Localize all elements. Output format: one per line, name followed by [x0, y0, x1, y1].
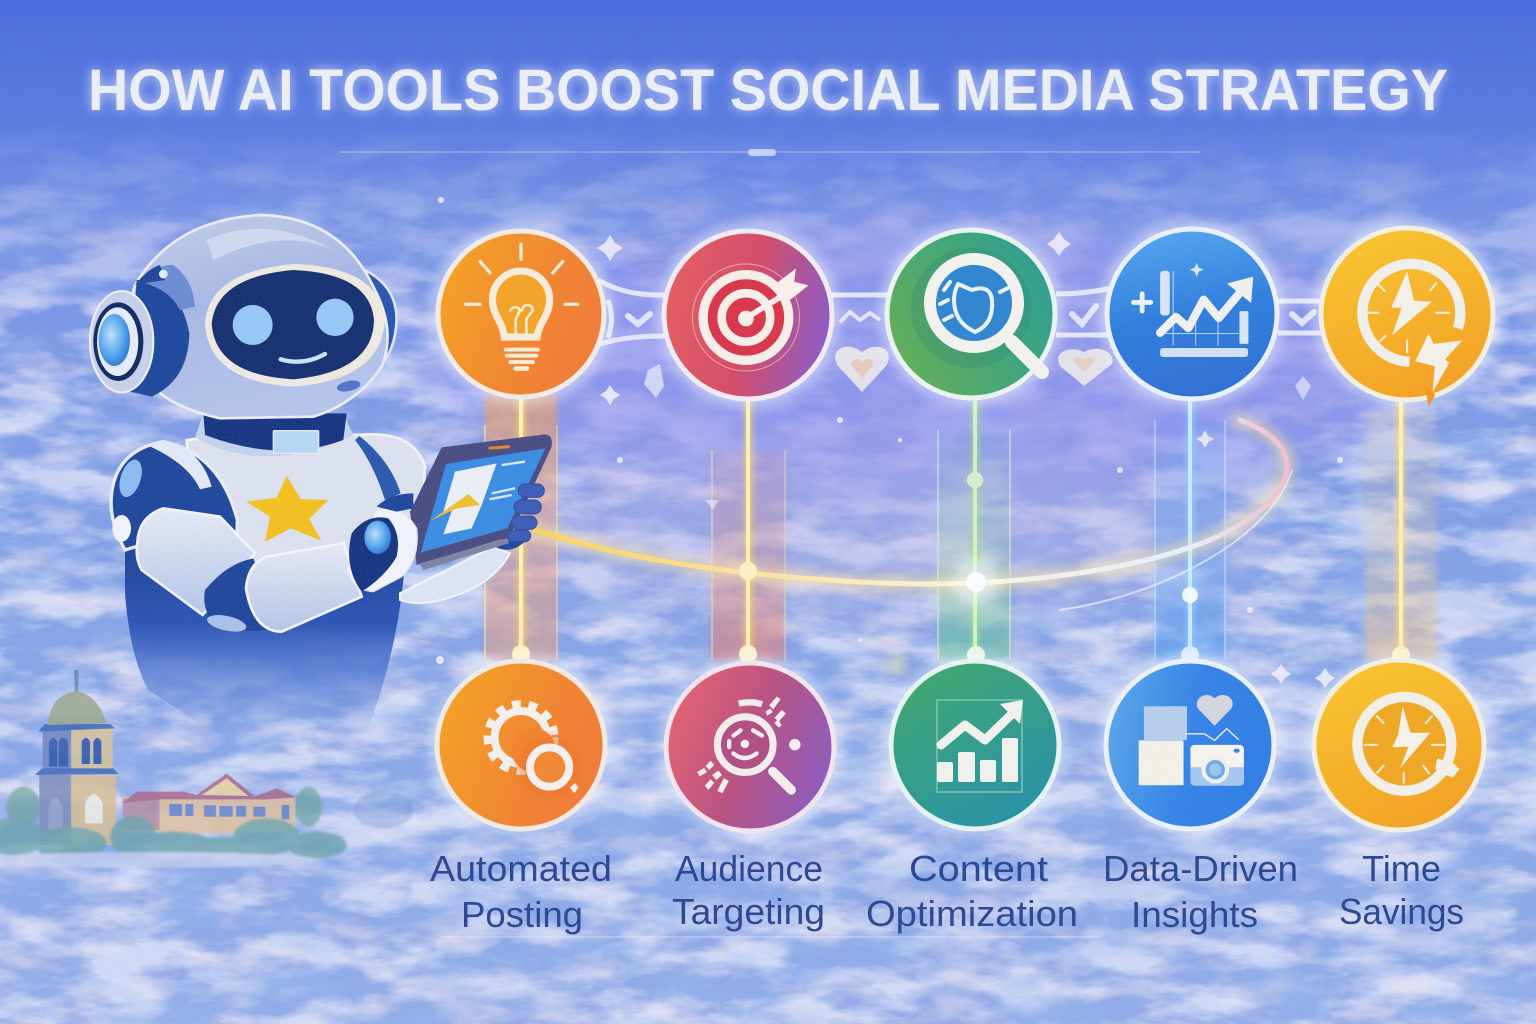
card: time savings top icon: [1313, 220, 1501, 408]
building: [122, 773, 296, 833]
column connectors: [484, 395, 1437, 664]
icon: blocks heart camera: [1139, 695, 1244, 786]
robot forearm: [246, 543, 362, 632]
card: content optimization: [883, 653, 1067, 837]
icon: rising line chart: [1134, 263, 1253, 357]
trees front: [0, 792, 413, 868]
card: automated posting: [429, 653, 613, 837]
icon: light bulb: [466, 244, 578, 369]
label: audience targeting: Targeting: [672, 891, 825, 932]
icon: clock with lightning: [1362, 264, 1462, 407]
robot torso: [187, 433, 425, 563]
label: time savings: [1339, 848, 1464, 932]
label: automated posting: Posting: [461, 894, 583, 935]
robot far arm: [400, 533, 527, 603]
label: time savings: Time: [1362, 848, 1441, 889]
robot hand and wrist: [347, 493, 417, 592]
label: audience targeting: [672, 848, 825, 932]
connector: automated posting: [484, 395, 558, 663]
label: content optimization: [866, 848, 1078, 934]
connector: audience targeting: [711, 395, 786, 663]
link: posting to targeting: [598, 280, 665, 344]
card: data-driven insights: [1098, 653, 1282, 837]
icon: magnifier with data fragments: [697, 696, 801, 793]
icon: stopwatch with bolt: [1357, 697, 1460, 791]
label: data-driven insights: Insights: [1131, 894, 1258, 935]
trees back: [7, 787, 322, 827]
tower: [35, 670, 118, 845]
robot fingers: [507, 484, 544, 542]
card: time savings: [1306, 652, 1492, 838]
link: insights to time savings: [1278, 301, 1322, 333]
label: content optimization: Optimization: [866, 893, 1078, 934]
title: HOW AI TOOLS BOOST SOCIAL MEDIA STRATEGY: [88, 58, 1448, 123]
icon: bar chart with arrow: [937, 700, 1023, 792]
robot ear disc: [90, 291, 153, 392]
label: time savings: Savings: [1339, 891, 1464, 932]
robot lower body: [125, 533, 405, 733]
robot tablet: [410, 434, 552, 570]
label: automated posting: Automated: [430, 848, 612, 889]
robot neck: [195, 413, 353, 456]
robot visor: [205, 264, 385, 387]
robot shoulder: [111, 442, 237, 550]
title: HOW AI TOOLS BOOST SOCIAL MEDIA STRATEGY: [88, 58, 1448, 123]
robot mascot: [90, 215, 552, 733]
labels: [430, 848, 1464, 935]
decorative hearts: [835, 347, 1113, 392]
icon: gears: [488, 705, 582, 799]
connector: time savings: [1365, 395, 1437, 664]
label: content optimization: Content: [909, 848, 1048, 889]
scene: bell tower and school building: [0, 670, 413, 868]
robot left ear band: [130, 280, 189, 397]
link: targeting to optimization: [830, 295, 888, 322]
connector: data-driven insights: [1154, 395, 1226, 664]
card: data-driven insights top icon: [1099, 221, 1285, 407]
sparkles: [436, 197, 1343, 688]
icon: magnifier with shield bug: [930, 259, 1042, 372]
card: audience targeting: [658, 655, 842, 839]
robot helmet: [130, 215, 388, 418]
link: optimization to insights: [1056, 288, 1112, 335]
robot upper arm: [137, 508, 280, 635]
label: audience targeting: Audience: [675, 848, 823, 889]
card: automated posting top icon: [429, 222, 613, 406]
robot right ear: [363, 271, 397, 363]
label: data-driven insights: Data-Driven: [1103, 848, 1298, 889]
connector: content optimization: [937, 395, 1011, 664]
glowing orbit arc: [530, 420, 1292, 610]
label: data-driven insights: [1103, 848, 1298, 935]
robot star: [246, 476, 328, 542]
card: content optimization top icon: [879, 222, 1063, 406]
icon: target and arrow: [692, 264, 808, 371]
label: automated posting: [430, 848, 612, 935]
card: audience targeting top icon: [656, 223, 840, 407]
